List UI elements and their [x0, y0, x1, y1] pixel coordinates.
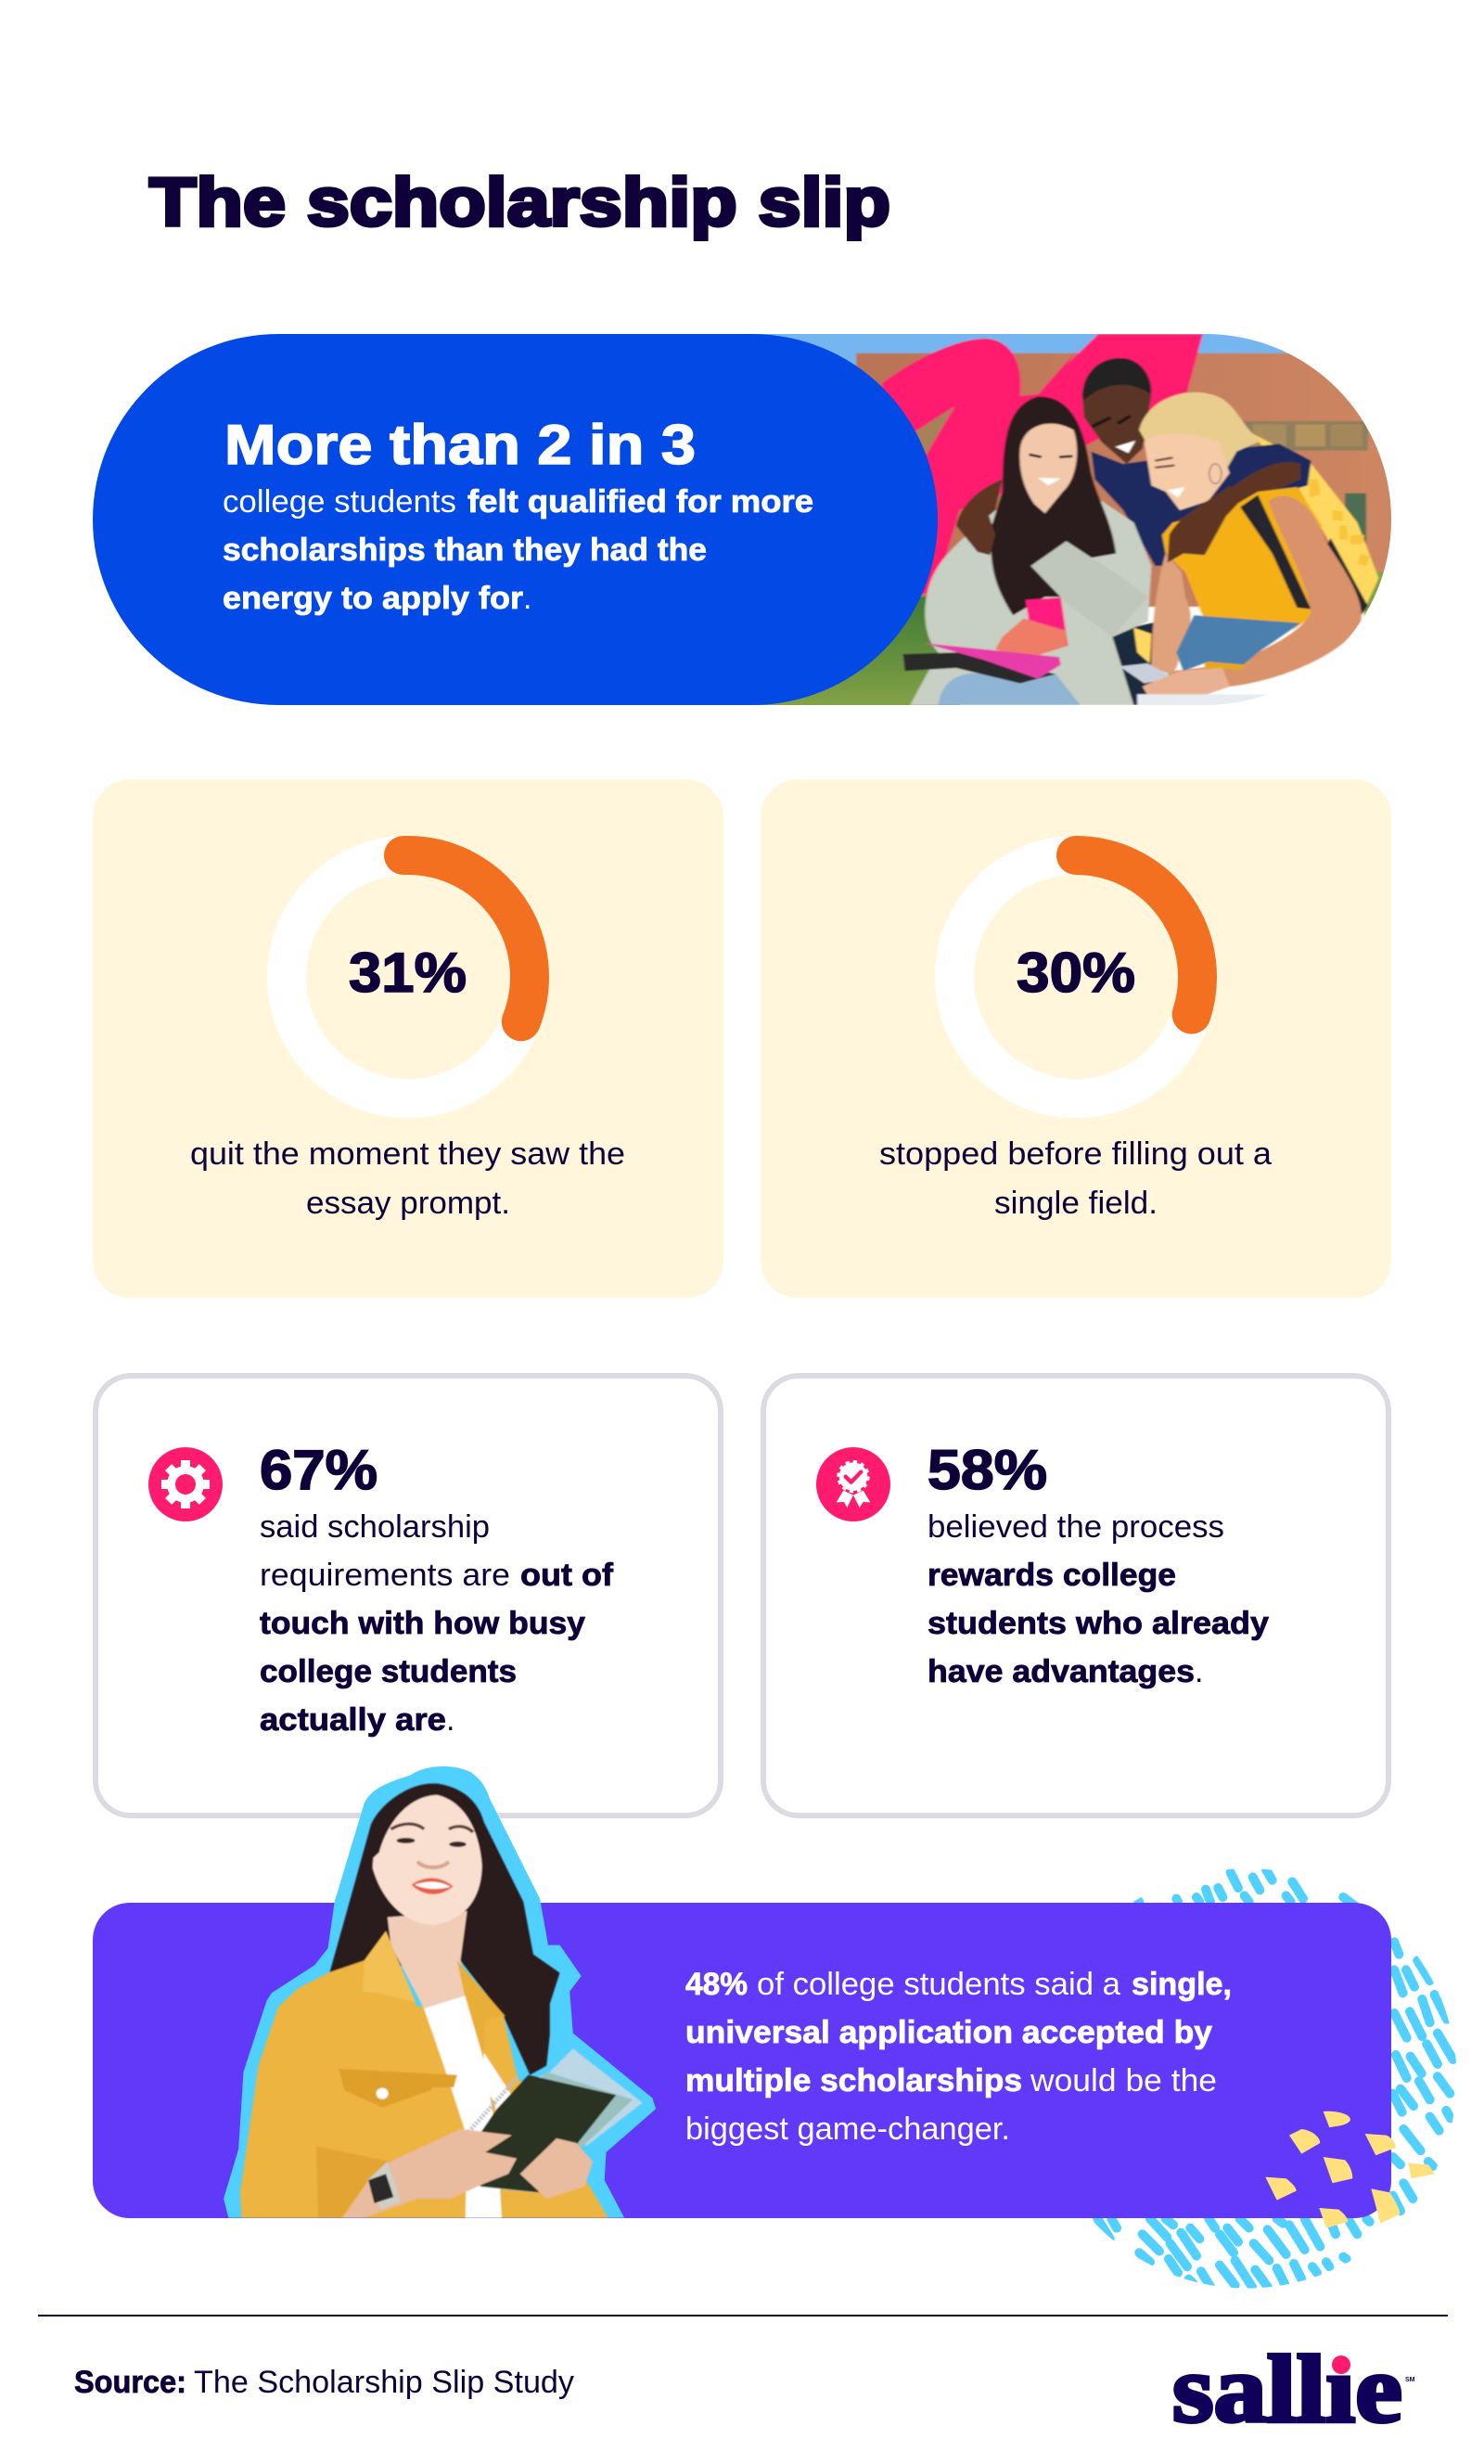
- hero body text: [223, 484, 813, 616]
- text: 67% description: out of: [520, 1558, 614, 1593]
- text: 58% description: .: [1195, 1654, 1203, 1689]
- hero photo: three students looking at a phone: [753, 334, 1391, 705]
- callout text: universal application accepted by: [685, 2015, 1212, 2050]
- panel: 31% stat card: [93, 779, 723, 1298]
- text: 58% description: have advantages: [928, 1654, 1195, 1689]
- text: 67% description: .: [446, 1702, 454, 1738]
- hero blue text pill: [93, 334, 938, 705]
- icon: award ribbon: [816, 1447, 890, 1521]
- callout text: biggest game-changer.: [685, 2111, 1010, 2147]
- donut chart: 31%: [287, 855, 530, 1098]
- panel: purple callout: [93, 1903, 1391, 2218]
- decorative dashed circle pattern: [1097, 1869, 1453, 2287]
- text: 58% description: [928, 1509, 1269, 1689]
- text: 67% description: touch with how busy: [260, 1606, 585, 1641]
- stat: 58%: 58%: [928, 1439, 1047, 1501]
- caption: 30%: stopped before filling out a: [879, 1136, 1272, 1172]
- photo: smiling student with notebook and blue outline: [224, 1766, 656, 2220]
- panel: 30% stat card: [761, 779, 1391, 1298]
- donut chart: 30%: [954, 855, 1197, 1098]
- hero stat headline: More than 2 in 3: [224, 414, 696, 476]
- callout text: would be the: [1030, 2063, 1217, 2098]
- callout text: of college students said a: [757, 1967, 1120, 2002]
- caption: 30%: single field.: [994, 1186, 1158, 1221]
- text: 67% description: [260, 1509, 614, 1738]
- callout text: single,: [1132, 1967, 1232, 2002]
- stat: 67%: 67%: [260, 1439, 377, 1501]
- yellow brush dabs: [1265, 2111, 1435, 2228]
- panel: hero banner: [93, 325, 1424, 717]
- text: 67% description: said scholarship: [260, 1509, 490, 1545]
- caption: 30%: [879, 1136, 1272, 1221]
- donut chart: 30%: 30%: [1017, 942, 1135, 1004]
- hero body text: energy to apply for: [223, 581, 523, 616]
- title: The scholarship slip: [149, 165, 890, 240]
- panel: 67% outlined card: [96, 1376, 721, 1816]
- callout text: 48%: [685, 1967, 748, 2002]
- caption: 31%: essay prompt.: [306, 1186, 510, 1221]
- hero body text: scholarships than they had the: [223, 533, 707, 568]
- text: 58% description: believed the process: [928, 1509, 1224, 1545]
- footer divider line: [38, 2315, 1448, 2316]
- donut chart: 31%: 31%: [349, 942, 467, 1004]
- callout text: multiple scholarships: [685, 2063, 1022, 2098]
- source note: Source:: [74, 2365, 186, 2400]
- caption: 31%: quit the moment they saw the: [190, 1136, 625, 1172]
- hero body text: felt qualified for more: [467, 484, 813, 520]
- text: 58% description: students who already: [928, 1606, 1269, 1641]
- logo: sallie: SM: [1405, 2377, 1415, 2383]
- source note: The Scholarship Slip Study: [194, 2365, 574, 2400]
- icon: gear: [148, 1447, 223, 1521]
- text: 67% description: college students: [260, 1654, 517, 1689]
- logo: sallie: sallie: [1172, 2336, 1402, 2443]
- caption: 31%: [190, 1136, 625, 1221]
- text: 67% description: requirements are: [260, 1558, 510, 1593]
- hero body text: college students: [223, 484, 456, 520]
- callout text: [685, 1967, 1232, 2147]
- panel: 58% outlined card: [763, 1376, 1388, 1816]
- hero body text: .: [523, 581, 531, 616]
- text: 58% description: rewards college: [928, 1558, 1176, 1593]
- text: 67% description: actually are: [260, 1702, 446, 1738]
